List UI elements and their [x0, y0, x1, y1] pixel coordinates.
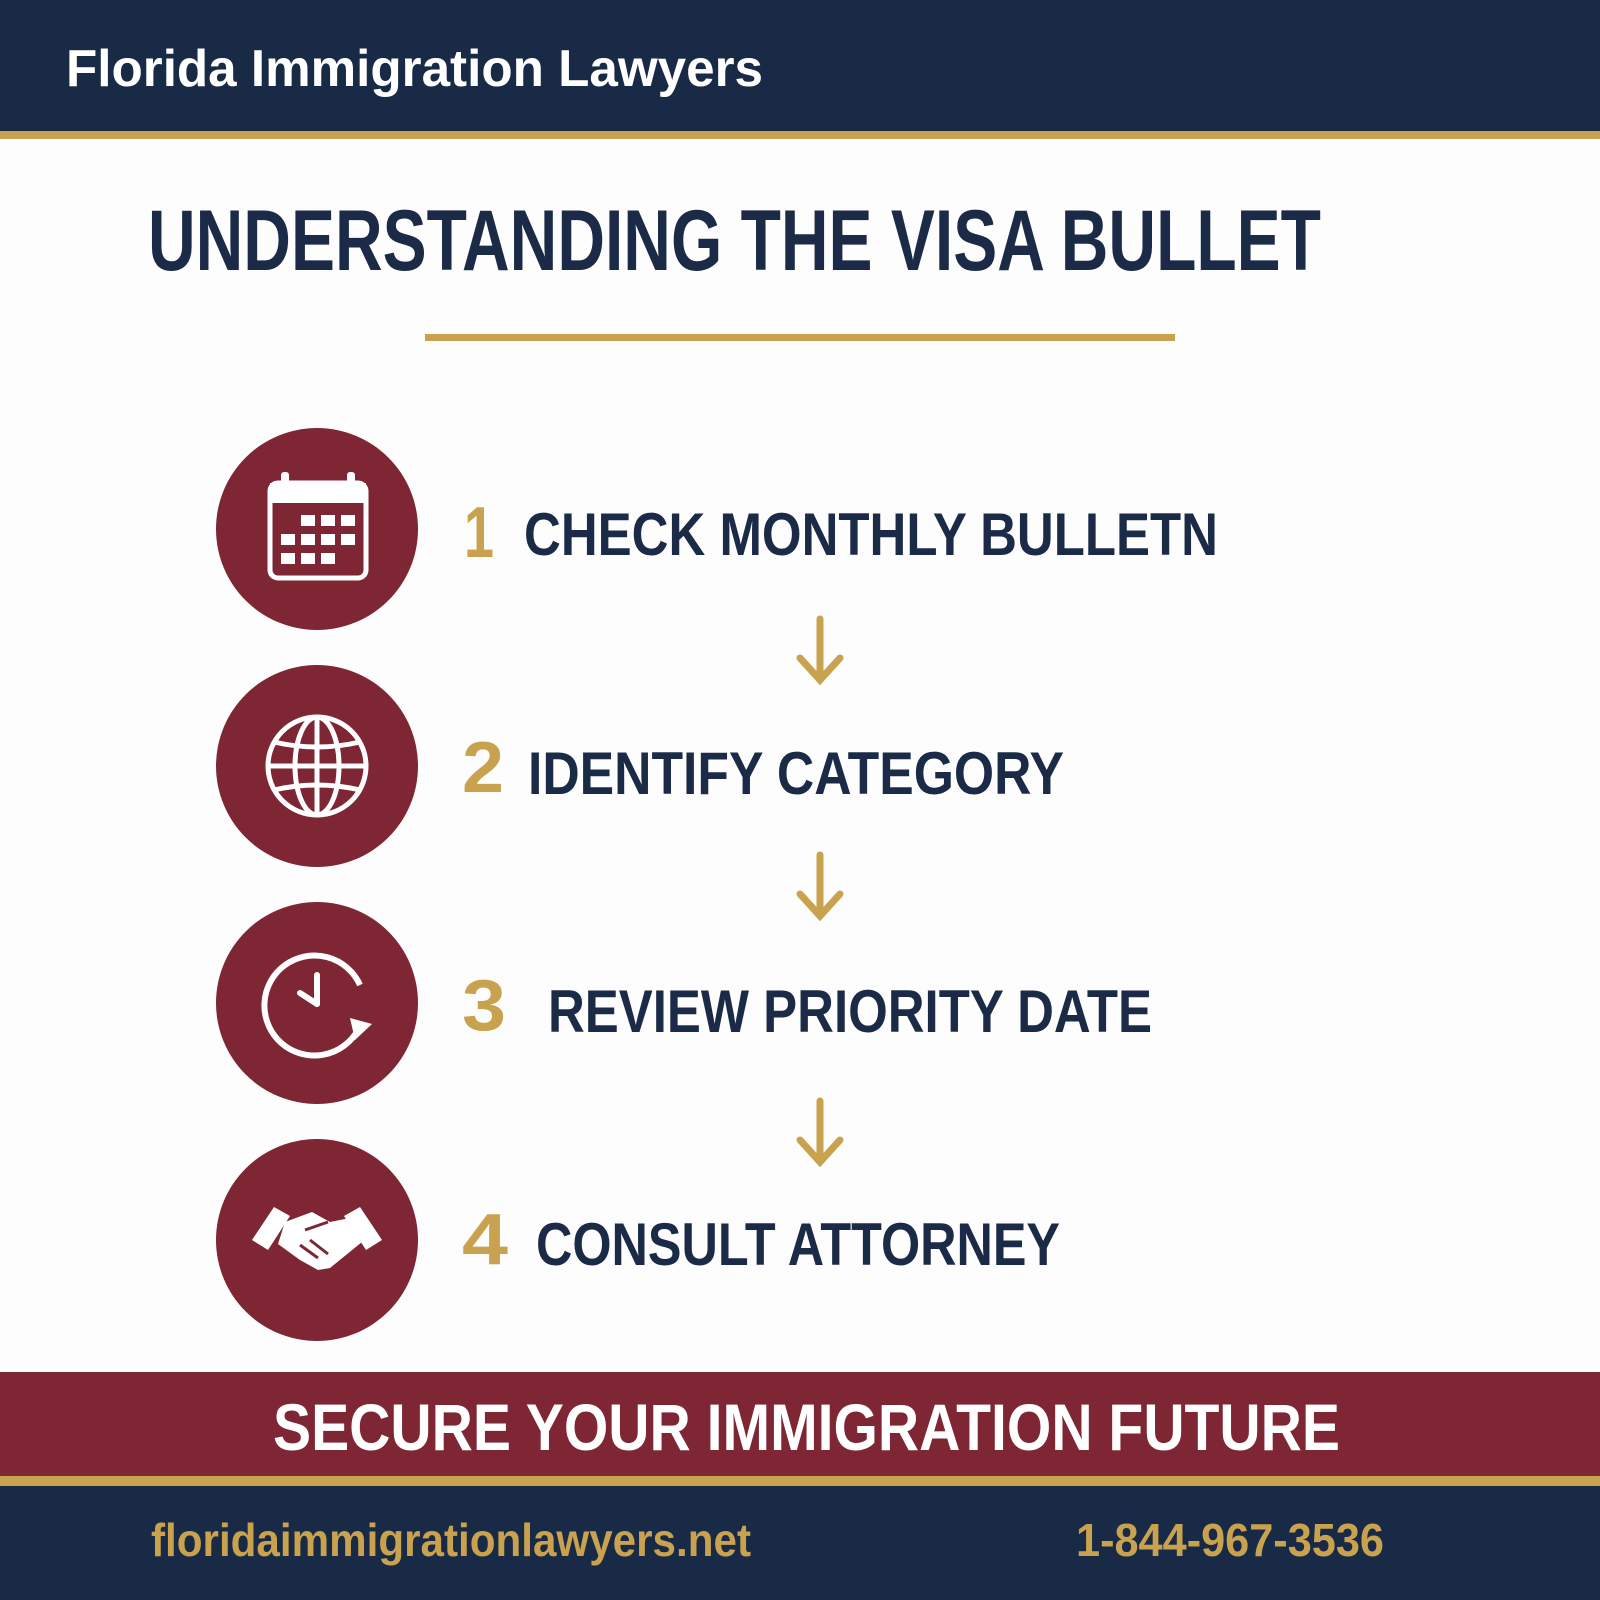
number 4: 4 [462, 1200, 508, 1280]
title divider [425, 334, 1175, 341]
icon: clock [216, 902, 418, 1104]
step 1 label: CHECK MONTHLY BULLETN [524, 501, 1218, 568]
header title: Florida Immigration Lawyers [66, 40, 763, 98]
number 3: 3 [462, 966, 506, 1046]
icon: calendar [216, 428, 418, 630]
header bar [0, 0, 1600, 139]
number 2: 2 [462, 728, 504, 808]
arrow 2 [800, 855, 840, 916]
step 4 label: CONSULT ATTORNEY [536, 1211, 1060, 1278]
icon: globe [216, 665, 418, 867]
step 1 [216, 428, 1218, 630]
step 2 [216, 665, 1064, 867]
step 3 label: REVIEW PRIORITY DATE [548, 978, 1152, 1045]
bottom banner [0, 1372, 1600, 1476]
number 1: 1 [464, 493, 494, 573]
footer url: floridaimmigrationlawyers.net [151, 1514, 751, 1566]
arrow 1 [800, 619, 840, 680]
arrow 3 [800, 1101, 840, 1162]
step 4 [216, 1139, 1060, 1341]
footer phone: 1-844-967-3536 [1076, 1514, 1384, 1566]
footer [0, 1476, 1600, 1600]
step 2 label: IDENTIFY CATEGORY [528, 740, 1064, 807]
icon: handshake [216, 1139, 418, 1341]
step 3 [216, 902, 1152, 1104]
banner text: SECURE YOUR IMMIGRATION FUTURE [273, 1390, 1340, 1464]
